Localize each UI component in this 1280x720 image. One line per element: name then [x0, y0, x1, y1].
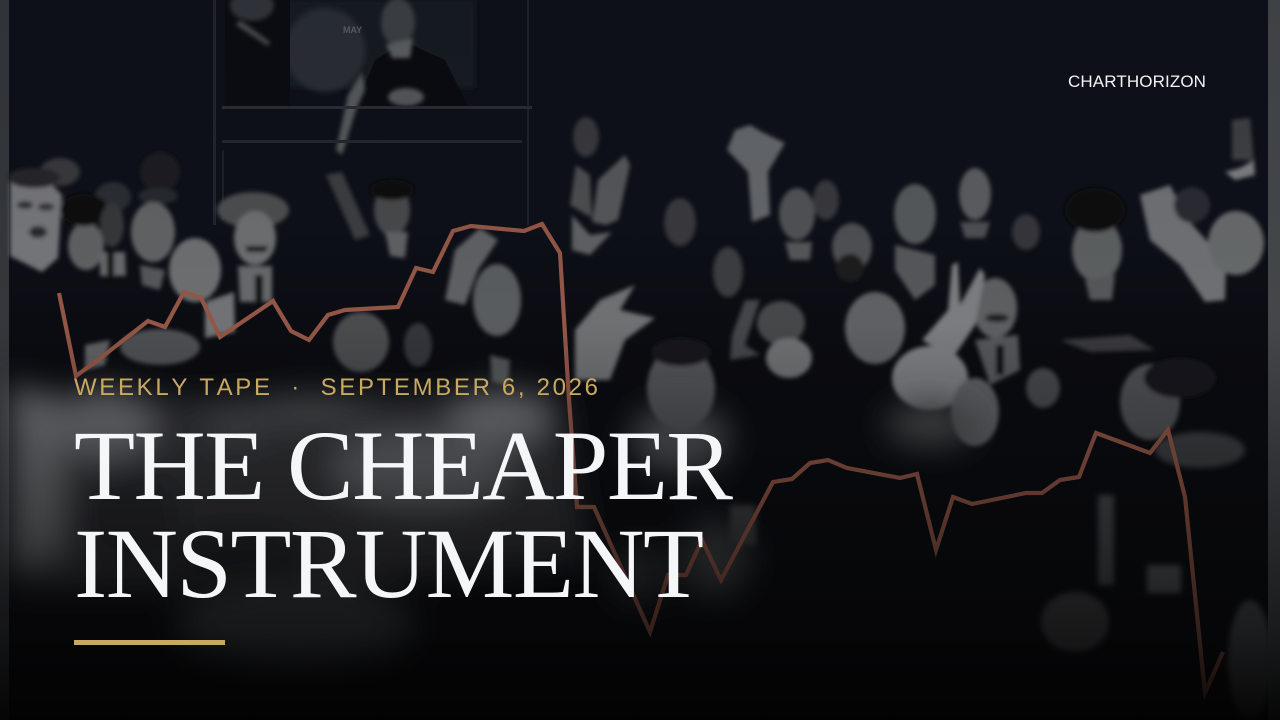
- brand label: CHARTHORIZON: [1068, 72, 1206, 91]
- quotation board with two men: [213, 0, 532, 225]
- lower-right hands and papers: [730, 432, 1272, 720]
- gold rule: [74, 640, 225, 645]
- price line: [59, 224, 1223, 693]
- title: THE CHEAPER INSTRUMENT: [74, 410, 731, 619]
- raised hands centre: [570, 117, 785, 380]
- lower-left pale figures: [10, 385, 975, 667]
- faces and hands: right group: [647, 118, 1264, 446]
- faces and hands: left group: [8, 152, 521, 385]
- quotation board with two men: MAY: [343, 25, 362, 35]
- eyebrow: weekly tape and date: WEEKLY TAPE · SEPTEMBER 6, 2026: [74, 374, 601, 401]
